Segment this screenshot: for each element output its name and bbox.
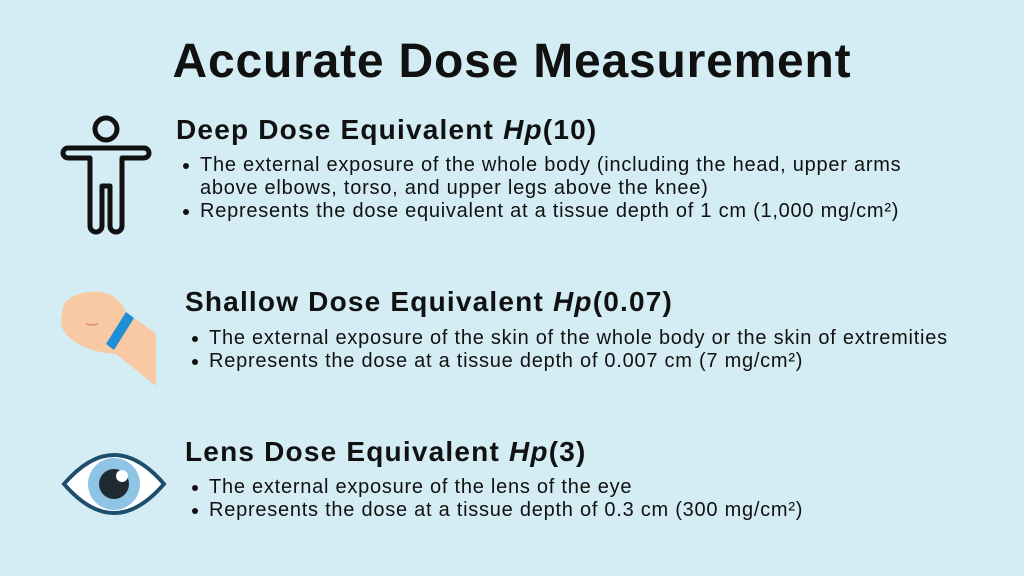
icon: eye: [62, 453, 166, 515]
icon: person: [60, 116, 152, 234]
bullets: shallow dose: [192, 327, 948, 372]
bullets: shallow dose: Represents the dose at a tissue depth of 0.007 cm (7 mg/cm²): [209, 350, 803, 372]
bullets: lens dose: Represents the dose at a tissue depth of 0.3 cm (300 mg/cm²): [209, 499, 803, 521]
icon: wrist with band: [61, 292, 156, 386]
heading: shallow dose: Shallow Dose Equivalent Hp(0.07): [185, 286, 673, 317]
bullets: lens dose: The external exposure of the lens of the eye: [209, 476, 632, 498]
bullets: deep dose: Represents the dose equivalent at a tissue depth of 1 cm (1,000 mg/cm²): [200, 200, 899, 222]
title: Accurate Dose Measurement: [173, 35, 851, 88]
bullets: shallow dose: The external exposure of the skin of the whole body or the skin of extremities: [209, 327, 948, 349]
heading: deep dose: Deep Dose Equivalent Hp(10): [176, 114, 597, 145]
bullets: deep dose: The external exposure of the whole body (including the head, upper arms above elbows, torso, and upper legs above the knee): [200, 154, 901, 199]
bullets: deep dose: [183, 154, 901, 222]
heading: lens dose: Lens Dose Equivalent Hp(3): [185, 436, 587, 467]
bullets: lens dose: [192, 476, 803, 521]
